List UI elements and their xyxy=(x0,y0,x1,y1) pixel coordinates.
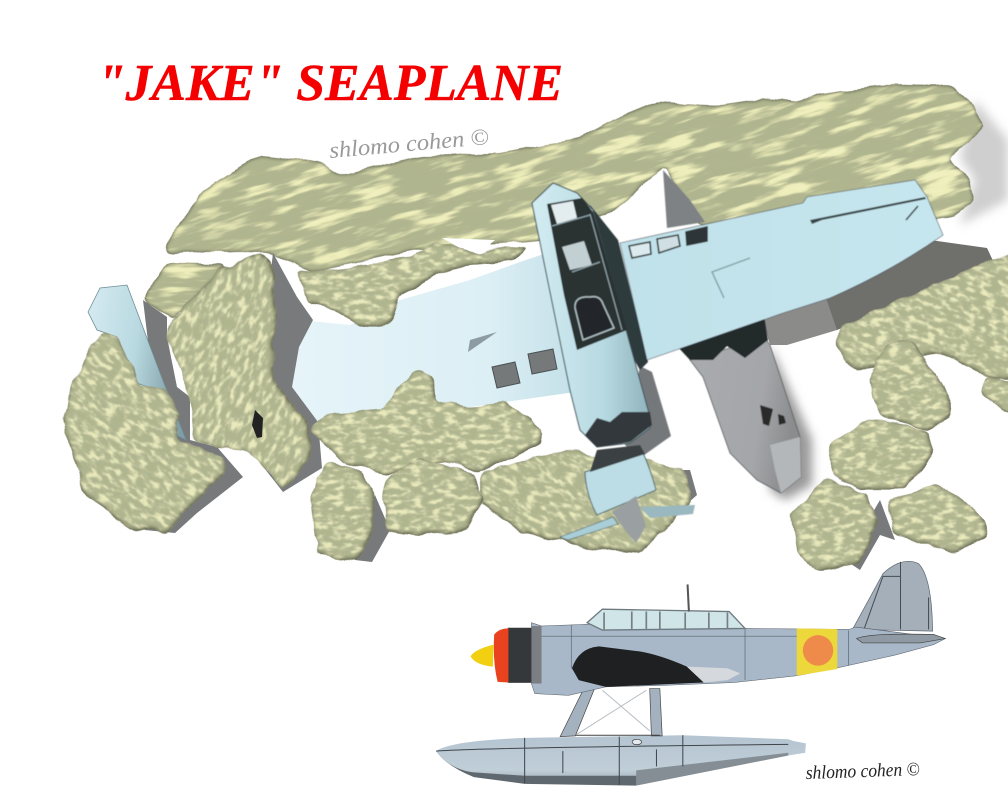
soft background shadow: reef xyxy=(960,100,1008,225)
rock: right stack 4 xyxy=(887,483,988,555)
cowling nose ring xyxy=(494,628,508,682)
fuselage xyxy=(531,623,945,695)
wing hatch outline xyxy=(712,258,750,298)
engine bay end xyxy=(585,412,652,447)
white gaps in reef xyxy=(442,198,668,255)
rock: right edge small xyxy=(980,376,1008,418)
title: "JAKE" SEAPLANE xyxy=(97,55,563,112)
rock: right band xyxy=(791,192,1008,440)
rock: right stack 3 xyxy=(790,478,878,570)
shadow: dark part on right rock xyxy=(825,240,995,330)
cowling xyxy=(508,628,532,683)
shadow: grey behind centre rock xyxy=(250,253,322,492)
wing aileron mark xyxy=(906,206,918,220)
wing torn panel line xyxy=(810,197,926,224)
rock: centre left column xyxy=(76,198,401,545)
rock: lower small centre xyxy=(383,458,483,536)
wing: starboard (right) xyxy=(620,180,943,360)
tail fin xyxy=(852,561,933,631)
cockpit: frames xyxy=(552,214,622,330)
tail fin lines xyxy=(864,562,929,629)
rock: far left xyxy=(0,254,320,609)
wing strut hole xyxy=(252,410,263,438)
rock shadows xyxy=(143,300,895,570)
spinner xyxy=(612,496,646,543)
dark gap between fuselage and wing xyxy=(590,205,648,370)
soft shadow of float xyxy=(770,345,812,500)
signature: bottom: shlomo cohen © xyxy=(805,759,920,784)
rock: right stack 1 xyxy=(870,340,953,430)
rock: lower right bulge behind engine xyxy=(435,357,738,645)
engine cowl xyxy=(585,453,656,515)
radiator xyxy=(687,667,740,682)
antenna xyxy=(688,584,689,612)
shadow: light part under wing xyxy=(763,290,853,345)
propeller blade left xyxy=(560,517,618,540)
cockpit: seat one xyxy=(551,201,577,224)
cowling vent xyxy=(531,626,542,684)
port wing flap notch xyxy=(468,332,497,352)
canopy xyxy=(587,609,745,630)
propeller blade right xyxy=(640,505,695,518)
reef: upper band xyxy=(117,0,1008,488)
tail plane xyxy=(857,634,945,643)
dark under starboard wing xyxy=(676,310,768,360)
hinomaru roundel xyxy=(803,635,833,666)
rock: lower bulge left 1 xyxy=(308,369,542,475)
wing: port (left) xyxy=(290,252,575,432)
spinner xyxy=(471,645,494,667)
wing openings xyxy=(629,227,707,258)
cockpit: seat three frame xyxy=(575,297,614,340)
yellow band xyxy=(797,628,837,676)
rock: inner upper xyxy=(297,243,533,329)
shadow under fuselage xyxy=(625,366,671,458)
signature: top: shlomo cohen © xyxy=(328,124,490,163)
float pylon xyxy=(572,646,704,687)
rock: right stack 2 xyxy=(828,418,935,490)
port wing panel openings xyxy=(492,349,557,388)
tail fin behind wing xyxy=(663,170,705,228)
lower plane xyxy=(436,561,945,786)
wreck: main plane xyxy=(532,170,943,543)
float seen from above xyxy=(690,335,801,493)
panel lines xyxy=(542,625,848,680)
connection of engine and fuselage xyxy=(590,445,645,472)
side float xyxy=(436,735,806,786)
float: wrecked left float xyxy=(88,285,186,440)
rock: lower small left xyxy=(310,461,375,562)
fuselage xyxy=(532,183,650,447)
float struts xyxy=(560,685,662,737)
cockpit: seat two xyxy=(562,241,592,270)
cockpit interior xyxy=(547,198,627,350)
rock: upper left shoulder xyxy=(143,263,228,320)
